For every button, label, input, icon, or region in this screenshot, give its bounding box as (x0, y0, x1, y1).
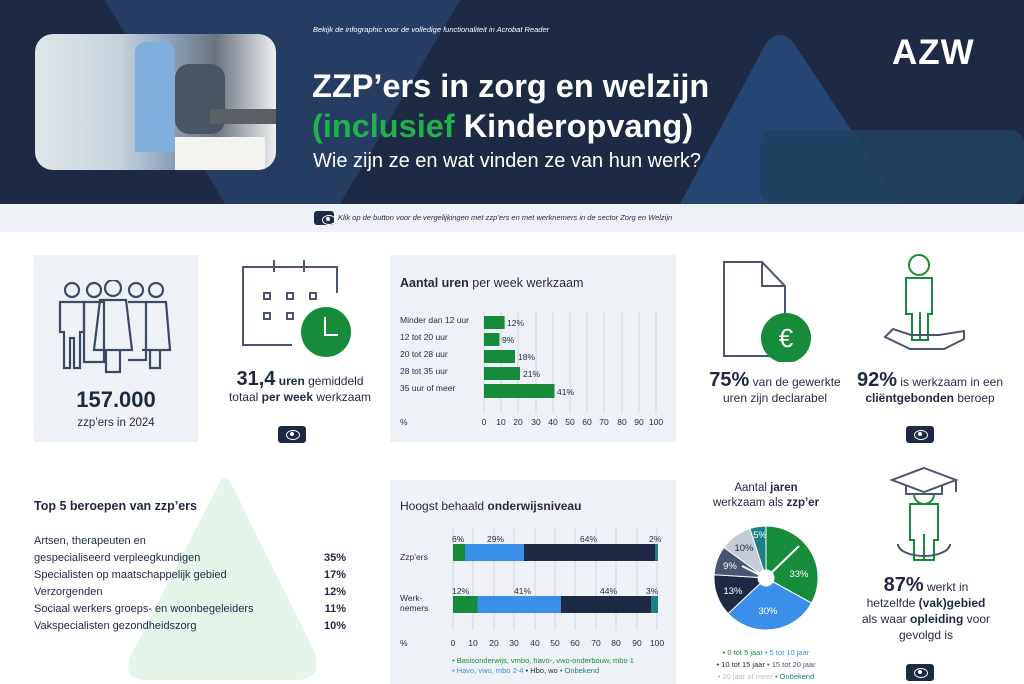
text: 92%: cliëntgebonden beroep (865, 391, 995, 405)
strip (0, 204, 1024, 232)
panel: education chart: 70 (591, 638, 601, 648)
panel: education chart: 20 (489, 638, 499, 648)
panel: top 5 beroepen: Artsen, therapeuten en (34, 535, 146, 547)
panel: education chart: 100 (650, 638, 664, 648)
panel: education chart: 2% (649, 534, 662, 544)
panel: bar chart hours: 12 tot 20 uur (400, 332, 448, 342)
panel: top 5 beroepen: 11% (325, 603, 346, 615)
text: hours: 31,4 uren gemiddeld (236, 368, 364, 390)
panel: education chart: 80 (611, 638, 621, 648)
icon: document euro: € (779, 323, 794, 353)
panel: education chart: 10 (468, 638, 478, 648)
panel: bar chart hours: 40 (548, 417, 558, 427)
panel: top 5 beroepen: 35% (324, 552, 346, 564)
panel: bar chart hours: Minder dan 12 uur (400, 315, 469, 325)
note: Bekijk de infographic voor de volledige functionaliteit in Acrobat Reader (313, 25, 549, 34)
panel: top 5 beroepen: Sociaal werkers groeps- en woonbegeleiders (34, 603, 254, 615)
panel: education chart: 40 (530, 638, 540, 648)
text: 87% (862, 574, 990, 642)
panel: top 5 beroepen: Vakspecialisten gezondheidszorg (34, 620, 196, 632)
panel: education chart: 64% (580, 534, 597, 544)
panel: bar chart hours: 80 (617, 417, 627, 427)
panel: bar chart hours: 0 (482, 417, 487, 427)
pie chart: years: 9% (723, 561, 737, 572)
pie chart: years: 13% (723, 586, 743, 597)
pie chart: years: • 20 jaar of meer • Onbekend (718, 672, 814, 681)
panel: bar chart hours: 9% (502, 335, 515, 345)
panel: top 5 beroepen (34, 478, 346, 680)
panel: bar chart hours: 21% (523, 369, 540, 379)
panel: bar chart hours: 30 (531, 417, 541, 427)
panel: top 5 beroepen: 10% (324, 620, 346, 632)
text: 75% (709, 369, 841, 405)
panel: bar chart hours: 10 (496, 417, 506, 427)
panel: education chart: 41% (514, 586, 531, 596)
panel: education chart: Hoogst behaald onderwijsniveau (400, 499, 581, 513)
panel: bar chart hours: 50 (565, 417, 575, 427)
panel: education chart: 6% (452, 534, 465, 544)
panel: top 5 beroepen: gespecialiseerd verpleegkundigen (34, 552, 200, 564)
photo (35, 34, 276, 170)
panel: bar chart hours: 100 (649, 417, 663, 427)
panel: top 5 beroepen: Specialisten op maatschappelijk gebied (34, 569, 227, 581)
panel: top 5 beroepen: Top 5 beroepen van zzp’ers (34, 499, 197, 513)
text: 87%: als waar opleiding voor (862, 612, 990, 626)
icon: person on hand (883, 254, 965, 350)
panel: bar chart hours: 60 (582, 417, 592, 427)
pie chart: years: 33% (789, 569, 809, 580)
title: ZZP’ers in zorg en welzijn (312, 68, 709, 104)
title: (inclusief Kinderopvang) (312, 108, 693, 144)
panel: bar chart hours (390, 255, 676, 442)
text: 75%: uren zijn declarabel (723, 391, 827, 405)
pie chart: years: 10% (734, 543, 754, 554)
panel: bar chart hours: 28 tot 35 uur (400, 366, 448, 376)
text: hours (229, 368, 371, 404)
pie chart: years: werkzaam als zzp’er (713, 497, 819, 509)
panel: zzp count (34, 255, 198, 442)
panel: zzp count: zzp’ers in 2024 (77, 417, 155, 429)
text: 87%: hetzelfde (vak)gebied (867, 596, 985, 610)
pie chart: years: 30% (758, 606, 778, 617)
panel: top 5 beroepen: 17% (324, 569, 346, 581)
panel: bar chart hours: % (400, 417, 408, 427)
panel: bar chart hours: 90 (634, 417, 644, 427)
text: 75%: 75% van de gewerkte (709, 369, 841, 391)
panel: bar chart hours: 20 (513, 417, 523, 427)
text: 92%: 92% is werkzaam in een (857, 369, 1003, 391)
pie chart: years: Aantal jaren (734, 482, 798, 494)
panel: education chart: 60 (570, 638, 580, 648)
icon: document euro (723, 261, 811, 362)
panel: bar chart hours: 12% (507, 318, 524, 328)
panel: bar chart hours: Aantal uren per week werkzaam (400, 276, 583, 290)
panel: education chart: • Havo, vwo, mbo 2-4 • Hbo, wo • Onbekend (452, 666, 599, 675)
text: 87%: 87% werkt in (884, 574, 968, 596)
pie chart: years (713, 482, 819, 681)
text: 87%: gevolgd is (899, 628, 953, 642)
strip: Klik op de button voor de vergelijkingen met zzp’ers en met werknemers in de sector Zorg en Welzijn (338, 213, 672, 222)
panel: education chart: nemers (400, 603, 428, 613)
title (312, 68, 709, 144)
pie chart: years: • 0 tot 5 jaar • 5 tot 10 jaar (723, 648, 810, 657)
panel: education chart: 29% (487, 534, 504, 544)
panel: education chart: 30 (509, 638, 519, 648)
icon: graduate (889, 466, 959, 561)
panel: education chart: • Basisonderwijs, vmbo, havo-, vwo-onderbouw, mbo 1 (452, 656, 634, 665)
panel: bar chart hours: 41% (557, 387, 574, 397)
panel: education chart: 3% (646, 586, 659, 596)
panel: bar chart hours: 35 uur of meer (400, 383, 455, 393)
header (0, 0, 1024, 204)
panel: education chart: 12% (452, 586, 469, 596)
panel: bar chart hours: 70 (599, 417, 609, 427)
panel: education chart: 90 (632, 638, 642, 648)
panel: top 5 beroepen: 12% (324, 586, 346, 598)
panel: education chart: 50 (550, 638, 560, 648)
pie chart: years: 5% (753, 530, 767, 541)
panel: education chart: 0 (451, 638, 456, 648)
subtitle: Wie zijn ze en wat vinden ze van hun werk? (313, 150, 701, 172)
text: 92% (857, 369, 1003, 405)
panel: bar chart hours: 20 tot 28 uur (400, 349, 448, 359)
panel: education chart (390, 480, 676, 684)
icon: calendar clock (242, 260, 351, 357)
pie chart: years: • 10 tot 15 jaar • 15 tot 20 jaar (716, 660, 816, 669)
panel: education chart: 44% (600, 586, 617, 596)
text: hours: totaal per week werkzaam (229, 390, 371, 404)
panel: education chart: % (400, 638, 408, 648)
panel: education chart: Zzp’ers (400, 552, 428, 562)
icon: people (58, 280, 172, 374)
logo: AZW (892, 33, 975, 72)
number: 157.000 (76, 387, 156, 412)
panel: bar chart hours: 18% (518, 352, 535, 362)
panel: top 5 beroepen: Verzorgenden (34, 586, 102, 598)
panel: education chart: Werk- (400, 593, 423, 603)
